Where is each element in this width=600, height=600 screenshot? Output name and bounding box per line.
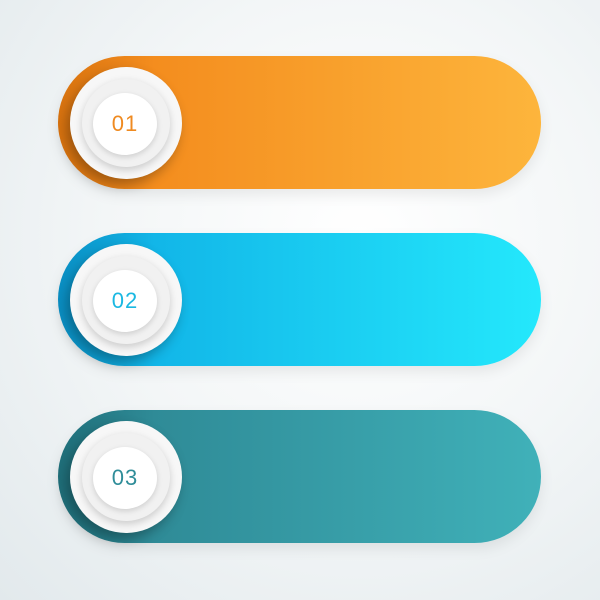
button 02 <box>60 244 185 369</box>
bar 03 teal <box>58 410 541 543</box>
bar 01 orange <box>58 56 541 189</box>
button 01: 01 <box>112 111 138 136</box>
button 03 <box>60 421 183 546</box>
button 01 <box>60 66 185 192</box>
button 03: 03 <box>112 465 138 490</box>
bar 02 blue <box>58 233 541 366</box>
button 02: 02 <box>112 288 138 313</box>
